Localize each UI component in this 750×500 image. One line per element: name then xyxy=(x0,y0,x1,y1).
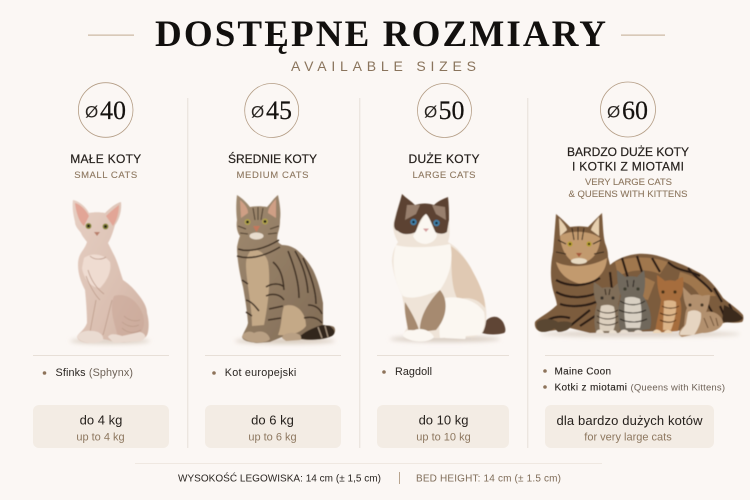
subheading xyxy=(568,177,688,200)
divider rule xyxy=(205,355,341,356)
heading xyxy=(567,145,689,174)
heading: I KOTKI Z MIOTAMI xyxy=(572,160,684,174)
cat: ragdoll xyxy=(390,194,505,342)
weight box: up to 4 kg xyxy=(76,432,125,444)
weight box xyxy=(377,405,509,448)
breed list xyxy=(543,366,725,394)
size badge 40 xyxy=(78,83,133,137)
breed list: Kot europejski xyxy=(225,367,296,379)
divider rule xyxy=(545,355,714,356)
subheading: LARGE CATS xyxy=(412,170,476,181)
weight box: up to 10 kg xyxy=(416,432,471,444)
cat: sphynx xyxy=(70,200,150,344)
footer: bed height: WYSOKOŚĆ LEGOWISKA: 14 cm (± 1,5 cm) xyxy=(178,472,381,484)
cat: tabby xyxy=(235,195,335,344)
breed list: (Queens with Kittens) xyxy=(630,382,725,394)
breed list: Sfinks (Sphynx) xyxy=(56,367,133,379)
breed list: Maine Coon xyxy=(554,366,611,378)
heading: MAŁE KOTY xyxy=(70,152,141,166)
kitten 2 xyxy=(617,270,651,333)
subheading: & QUEENS WITH KITTENS xyxy=(568,189,688,200)
weight box: up to 6 kg xyxy=(248,432,297,444)
heading: BARDZO DUŻE KOTY xyxy=(567,145,689,159)
kitten 3 xyxy=(653,275,683,333)
subtitle: AVAILABLE SIZES xyxy=(291,58,476,74)
size badge 60: Ø xyxy=(607,102,620,122)
panel: small cats xyxy=(33,83,169,448)
subheading: MEDIUM CATS xyxy=(236,170,308,181)
footer: bed height xyxy=(178,472,561,484)
size badge 60 xyxy=(600,82,656,137)
size badge 45: 45 xyxy=(266,96,292,125)
size badge 40: 40 xyxy=(100,96,126,125)
kitten 1 xyxy=(594,282,620,333)
breed list: Ragdoll xyxy=(395,366,432,378)
size badge 40: Ø xyxy=(85,102,98,122)
kitten 4 xyxy=(679,287,723,337)
weight box: do 4 kg xyxy=(80,412,122,428)
weight box xyxy=(205,405,341,448)
size badge 60: 60 xyxy=(622,96,648,125)
divider rule xyxy=(377,355,509,356)
weight box: do 6 kg xyxy=(251,412,294,428)
breed list: Kotki z miotami xyxy=(554,382,627,394)
size badge 45 xyxy=(245,84,299,138)
weight box: dla bardzo dużych kotów xyxy=(556,413,703,428)
weight box: do 10 kg xyxy=(419,412,468,428)
weight box xyxy=(33,405,169,448)
weight box: for very large cats xyxy=(584,432,672,444)
size badge 50 xyxy=(418,84,472,138)
divider rule xyxy=(33,355,169,356)
footer rule xyxy=(135,463,602,464)
heading: ŚREDNIE KOTY xyxy=(228,151,317,166)
title: DOSTĘPNE ROZMIARY xyxy=(155,14,606,55)
subheading: SMALL CATS xyxy=(74,170,137,181)
size badge 45: Ø xyxy=(251,102,264,122)
heading: DUŻE KOTY xyxy=(408,152,480,166)
subheading: VERY LARGE CATS xyxy=(585,177,672,188)
column dividers xyxy=(187,98,528,448)
cats: maine coon with kittens xyxy=(535,213,743,337)
panel: very large cats xyxy=(535,82,743,448)
size badge 50: 50 xyxy=(438,96,464,125)
panel: medium cats xyxy=(205,84,341,448)
size badge 50: Ø xyxy=(424,102,437,122)
weight box xyxy=(545,405,714,448)
panel: large cats xyxy=(377,84,509,448)
footer: bed height: BED HEIGHT: 14 cm (± 1.5 cm) xyxy=(416,474,561,484)
